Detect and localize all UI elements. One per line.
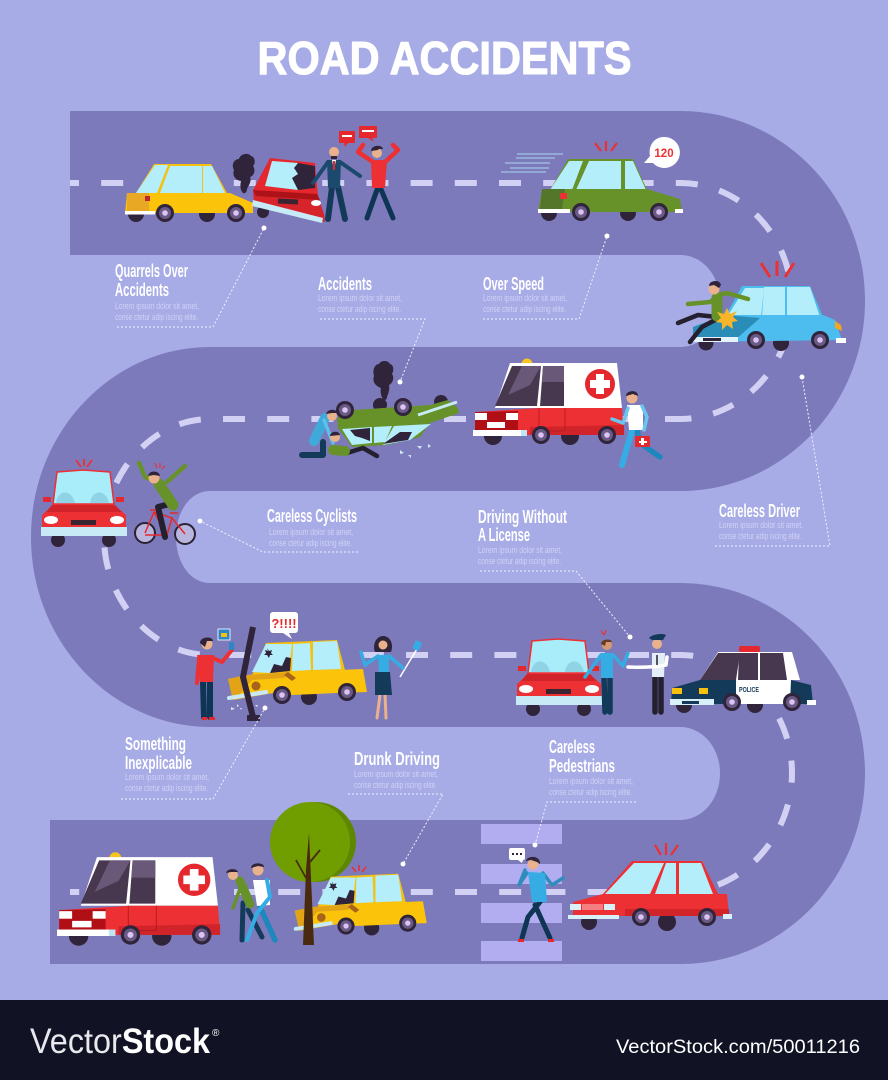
label: over speed: Over Speed xyxy=(483,274,544,294)
overturned green car xyxy=(336,395,459,458)
label: driving without a license xyxy=(478,507,632,640)
ambulance xyxy=(473,358,624,445)
impact star xyxy=(716,308,738,330)
kneeling rescuer xyxy=(302,410,338,455)
zebra crossing xyxy=(481,824,562,961)
label: careless pedestrians: conse ctetur adip iscing elite. xyxy=(549,787,632,797)
logo: VectorStock xyxy=(30,1022,210,1061)
police car: POLICE xyxy=(739,687,759,694)
yellow car xyxy=(125,164,253,222)
man with phone xyxy=(197,629,234,720)
man on hood xyxy=(678,281,748,342)
label: careless pedestrians: Pedestrians xyxy=(549,756,615,776)
label: quarrels over accidents: Accidents xyxy=(115,280,169,300)
scene: something inexplicable xyxy=(197,612,422,720)
speed bubble 120: 120 xyxy=(654,148,674,160)
label: careless cyclists xyxy=(198,506,358,552)
pedestrian on phone xyxy=(518,857,563,942)
scene: over speed xyxy=(501,137,683,221)
label: drunk driving: Drunk Driving xyxy=(354,749,440,769)
label: drunk driving xyxy=(348,749,443,866)
friend in white xyxy=(247,863,275,940)
tree trunk xyxy=(296,833,320,945)
alert marks xyxy=(595,141,617,151)
label: careless pedestrians xyxy=(532,737,636,848)
title: ROAD ACCIDENTS xyxy=(258,32,632,84)
scene: ambulance and medic xyxy=(473,358,660,465)
crashed yellow car xyxy=(295,874,427,936)
label: driving without a license: Driving Without xyxy=(478,507,567,527)
police officer xyxy=(628,634,667,712)
label: something inexplicable: Something xyxy=(125,734,186,754)
bald man in suit xyxy=(313,147,360,219)
tree canopy xyxy=(270,802,356,882)
label: careless driver: Careless Driver xyxy=(719,501,800,521)
winding road xyxy=(31,111,865,964)
label: accidents xyxy=(318,274,425,384)
alert marks xyxy=(352,865,366,872)
red car front view xyxy=(516,639,602,716)
alert marks xyxy=(76,459,92,467)
label: something inexplicable xyxy=(121,706,268,799)
scene: ambulance and walking men xyxy=(57,852,275,946)
label: something inexplicable: conse ctetur adip iscing elite. xyxy=(125,783,208,793)
injured man xyxy=(330,432,377,456)
police car xyxy=(670,646,816,713)
shouting man in red xyxy=(358,145,398,218)
scene: careless pedestrians xyxy=(509,843,732,942)
scene: drunk driving xyxy=(270,802,427,945)
label: careless pedestrians: Lorem ipsum dolor sit amet, xyxy=(549,776,633,786)
blue car xyxy=(693,286,846,351)
smoke xyxy=(373,361,393,400)
woman with selfie stick xyxy=(361,636,422,718)
phone speech bubble xyxy=(509,848,525,863)
scene: careless cyclists xyxy=(41,459,195,547)
label: accidents: Lorem ipsum dolor sit amet, xyxy=(318,293,402,303)
cyclist xyxy=(139,463,185,537)
bicycle xyxy=(135,510,195,544)
label: careless driver: conse ctetur adip iscing elite. xyxy=(719,531,802,541)
label: careless cyclists: conse ctetur adip iscing elite. xyxy=(269,538,352,548)
scene: quarrels over accidents xyxy=(125,126,398,223)
label: quarrels over accidents: conse ctetur adip iscing elite. xyxy=(115,312,198,322)
label: careless cyclists: Careless Cyclists xyxy=(267,506,357,526)
alert marks xyxy=(761,261,794,277)
road centre line xyxy=(70,183,792,892)
label: careless pedestrians: Careless xyxy=(549,737,595,757)
debris xyxy=(231,704,258,710)
label: driving without a license: Lorem ipsum dolor sit amet, xyxy=(478,545,562,555)
label: something inexplicable: Inexplicable xyxy=(125,753,192,773)
driver xyxy=(585,630,628,712)
label: quarrels over accidents: Lorem ipsum dolor sit amet, xyxy=(115,301,199,311)
scene: driving without a license xyxy=(516,630,816,716)
exclamation bubble: ?!!!! xyxy=(271,616,297,631)
angry speech bubbles xyxy=(339,126,377,147)
label: careless cyclists: Lorem ipsum dolor sit amet, xyxy=(269,527,353,537)
label: drunk driving: Lorem ipsum dolor sit amet, xyxy=(354,769,438,779)
scene: accidents, overturned car xyxy=(302,361,459,458)
speed bubble 120 xyxy=(644,137,680,168)
red car front view xyxy=(41,470,127,547)
label: driving without a license: A License xyxy=(478,525,530,545)
label: accidents: conse ctetur adip iscing elite. xyxy=(318,304,401,314)
crashed red car xyxy=(252,158,325,223)
label: drunk driving: conse ctetur adip iscing elite. xyxy=(354,780,437,790)
label: driving without a license: conse ctetur adip iscing elite. xyxy=(478,556,561,566)
image id: VectorStock.com/50011216 xyxy=(616,1037,860,1058)
medic xyxy=(612,391,660,465)
red car side view xyxy=(568,861,732,931)
label: over speed: conse ctetur adip iscing elite. xyxy=(483,304,566,314)
crashed yellow car xyxy=(228,640,367,705)
alert marks xyxy=(655,843,678,855)
scene: careless driver xyxy=(678,261,846,351)
label: over speed: Lorem ipsum dolor sit amet, xyxy=(483,293,567,303)
label: quarrels over accidents xyxy=(115,226,266,327)
exclamation bubble xyxy=(270,612,298,639)
smoke xyxy=(233,154,255,193)
speed lines xyxy=(501,154,563,172)
footer bar xyxy=(0,1000,888,1080)
label: something inexplicable: Lorem ipsum dolor sit amet, xyxy=(125,772,209,782)
drunk man in green xyxy=(226,869,262,940)
label: careless driver xyxy=(715,374,830,546)
green car xyxy=(538,159,683,221)
label: over speed xyxy=(483,234,610,319)
label: accidents: Accidents xyxy=(318,274,372,294)
ambulance xyxy=(57,852,220,946)
registered mark: ® xyxy=(212,1028,220,1039)
pole xyxy=(243,627,260,718)
label: careless driver: Lorem ipsum dolor sit amet, xyxy=(719,520,803,530)
label: quarrels over accidents: Quarrels Over xyxy=(115,261,188,281)
